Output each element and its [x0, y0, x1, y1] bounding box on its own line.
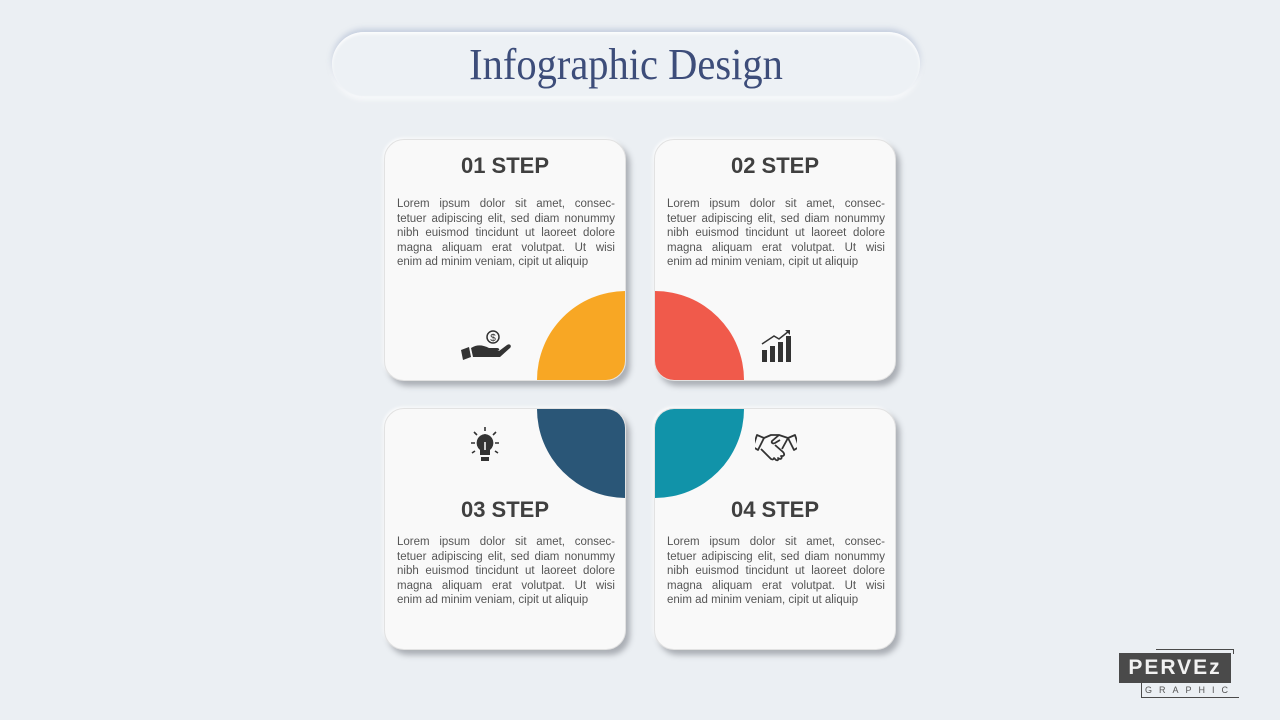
text 4: magna aliquam erat volutpat. Ut wisi: [667, 580, 885, 592]
heading 2: 02 STEP: [731, 153, 819, 178]
text 1: [397, 198, 615, 268]
text 4: nibh euismod tincidunt ut laoreet dolore: [667, 565, 885, 577]
text 2: magna aliquam erat volutpat. Ut wisi: [667, 242, 885, 254]
text 1: magna aliquam erat volutpat. Ut wisi: [397, 242, 615, 254]
text 3: enim ad minim veniam, cipit ut aliquip: [397, 594, 588, 606]
panel: step 3: [384, 408, 626, 650]
title: [332, 32, 920, 96]
text 2: nibh euismod tincidunt ut laoreet dolore: [667, 227, 885, 239]
text 3: Lorem ipsum dolor sit amet, consec-: [397, 536, 615, 548]
quarter circle navy: [537, 320, 715, 498]
text 1: tetuer adipiscing elit, sed diam nonummy: [397, 212, 615, 224]
text 3: [397, 536, 615, 606]
icon: lightbulb: [471, 427, 499, 461]
text 2: Lorem ipsum dolor sit amet, consec-: [667, 198, 885, 210]
icon: handshake: [755, 434, 797, 462]
logo: GRAPHIC: [1145, 685, 1235, 695]
panel: step 2: [654, 139, 896, 381]
quarter circle red: [566, 291, 744, 469]
title: Infographic Design: [469, 40, 783, 89]
panel: step 4: [654, 408, 896, 650]
panel: step 1: [384, 139, 626, 381]
icon: hand with coin: [461, 330, 511, 360]
logo: PERVEz: [1128, 656, 1222, 679]
quarter circle orange: [537, 291, 715, 469]
text 4: Lorem ipsum dolor sit amet, consec-: [667, 536, 885, 548]
text 2: [667, 198, 885, 268]
text 3: nibh euismod tincidunt ut laoreet dolore: [397, 565, 615, 577]
text 4: enim ad minim veniam, cipit ut aliquip: [667, 594, 858, 606]
text 4: [667, 536, 885, 606]
quarter circle teal: [566, 320, 744, 498]
icon: hand with coin: $: [490, 333, 496, 344]
icon: growth chart: [762, 330, 791, 362]
text 1: enim ad minim veniam, cipit ut aliquip: [397, 256, 588, 268]
text 2: enim ad minim veniam, cipit ut aliquip: [667, 256, 858, 268]
text 4: tetuer adipiscing elit, sed diam nonummy: [667, 550, 885, 562]
heading 4: 04 STEP: [731, 497, 819, 522]
heading 1: 01 STEP: [461, 153, 549, 178]
text 3: tetuer adipiscing elit, sed diam nonummy: [397, 550, 615, 562]
text 2: tetuer adipiscing elit, sed diam nonummy: [667, 212, 885, 224]
heading 3: 03 STEP: [461, 497, 549, 522]
text 3: magna aliquam erat volutpat. Ut wisi: [397, 580, 615, 592]
logo: [1119, 649, 1239, 698]
text 1: nibh euismod tincidunt ut laoreet dolore: [397, 227, 615, 239]
text 1: Lorem ipsum dolor sit amet, consec-: [397, 198, 615, 210]
